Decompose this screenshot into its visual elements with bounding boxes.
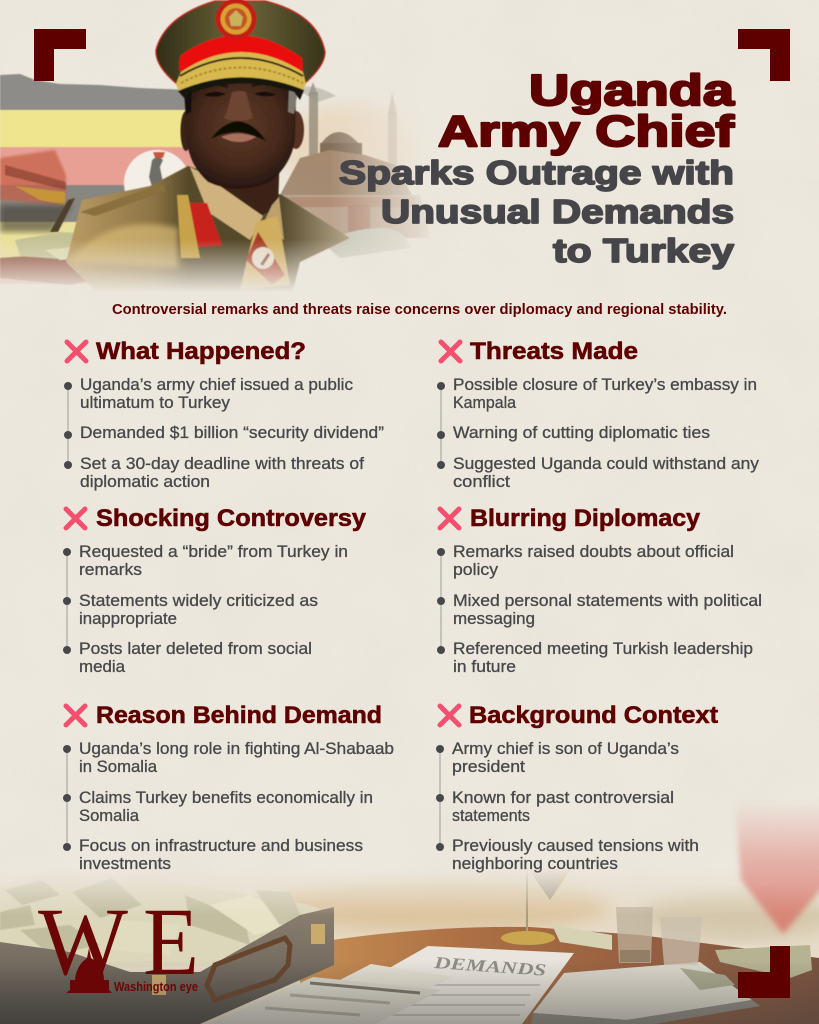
neck	[222, 172, 280, 215]
bullet text: Set a 30-day deadline with threats of	[80, 455, 364, 473]
logo: Washington Eye: E	[143, 888, 199, 995]
bullet text	[453, 376, 760, 491]
red band	[179, 35, 303, 74]
icon: x mark	[67, 342, 86, 361]
timeline	[63, 548, 71, 654]
collar	[190, 167, 263, 240]
heading: Threats Made	[470, 338, 638, 365]
bullet text: president	[452, 758, 525, 776]
bullet text: Army chief is son of Uganda’s	[452, 740, 679, 758]
bottom shade	[118, 967, 819, 1024]
bullet text	[79, 543, 348, 676]
bullet text: statements	[452, 807, 530, 825]
money and case left	[0, 198, 85, 285]
timeline	[63, 745, 71, 851]
subtitle: Controversial remarks and threats raise concerns over diplomacy and regional stability.	[112, 302, 727, 318]
cap badge	[216, 0, 256, 40]
bullet text	[79, 740, 394, 873]
bullet text: investments	[79, 855, 171, 873]
bullet text: Remarks raised doubts about official	[453, 543, 734, 561]
bullet text: Focus on infrastructure and business	[79, 837, 363, 855]
bottom scene: briefcase, money, table, papers	[0, 860, 819, 1024]
bullet text: Referenced meeting Turkish leadership	[453, 640, 753, 658]
desk flag	[501, 872, 568, 945]
heading: What Happened?	[96, 338, 306, 365]
hero illustration: flag, city, officer	[0, 0, 430, 295]
demands newspaper	[376, 946, 574, 1024]
money stacks	[0, 879, 322, 967]
tie	[240, 216, 290, 290]
Istanbul skyline	[278, 82, 430, 258]
bullet text	[452, 740, 699, 873]
title: Army Chief	[438, 107, 734, 156]
nose	[224, 91, 253, 121]
mustache	[211, 121, 266, 141]
bullet text: Previously caused tensions with	[452, 837, 699, 855]
bullet text: ultimatum to Turkey	[80, 394, 231, 412]
bullet text: in Somalia	[79, 758, 158, 776]
officer	[66, 0, 350, 295]
bullet text: Posts later deleted from social	[79, 640, 312, 658]
icon: x mark	[66, 706, 85, 725]
bullet text: Uganda’s army chief issued a public	[80, 376, 353, 394]
timeline	[64, 382, 72, 469]
head	[184, 81, 296, 189]
bullet text: policy	[453, 561, 499, 579]
timeline	[436, 745, 444, 851]
bullet text: diplomatic action	[80, 473, 210, 491]
bullet text: media	[79, 658, 126, 676]
title: Sparks Outrage with	[339, 154, 734, 191]
title: to Turkey	[553, 232, 735, 269]
bullet text: Suggested Uganda could withstand any	[453, 455, 760, 473]
cash on desk	[552, 925, 612, 950]
gold braid	[176, 52, 306, 92]
corner bracket bottom right	[738, 946, 790, 998]
bullet text: Uganda’s long role in fighting Al-Shabaab	[79, 740, 394, 758]
timeline	[437, 382, 445, 469]
bullet text: Requested a “bride” from Turkey in	[79, 543, 348, 561]
logo: Washington Eye	[38, 888, 199, 995]
heading: Blurring Diplomacy	[470, 505, 701, 532]
title: Uganda	[529, 66, 735, 115]
cap crown	[156, 1, 325, 84]
logo: Washington Eye: Washington eye	[114, 980, 198, 994]
bullet text: in future	[453, 658, 516, 676]
bullet text: remarks	[79, 561, 142, 579]
ears	[180, 110, 189, 152]
corner bracket top right	[738, 29, 790, 81]
red gorget patch and aiguillette	[189, 203, 222, 247]
panel: threats made	[437, 338, 760, 491]
bullet text	[80, 376, 384, 491]
icon: x mark	[440, 706, 459, 725]
glasses	[616, 907, 702, 965]
corner bracket top left	[34, 29, 86, 81]
panel: shocking controversy	[63, 505, 367, 676]
bullet text: Claims Turkey benefits economically in	[79, 789, 373, 807]
bullet text: Demanded $1 billion “security dividend”	[80, 424, 384, 442]
bullet text	[453, 543, 762, 676]
panel: blurring diplomacy	[437, 505, 762, 676]
table	[300, 927, 819, 1024]
demands newspaper: DEMANDS	[432, 953, 547, 980]
foreground newspaper	[262, 977, 440, 1024]
title: Unusual Demands	[381, 193, 734, 230]
paper pile	[530, 962, 760, 1024]
icon: x mark	[440, 509, 459, 528]
icon: x mark	[66, 509, 85, 528]
heading: Reason Behind Demand	[96, 702, 382, 729]
bullet text: Possible closure of Turkey’s embassy in	[453, 376, 757, 394]
logo: Washington Eye: W	[38, 888, 128, 995]
briefcase	[0, 907, 334, 1024]
panel: what happened	[64, 338, 384, 491]
bullet text: Warning of cutting diplomatic ties	[453, 424, 710, 442]
title	[339, 66, 735, 269]
panel: background context	[436, 702, 718, 873]
timeline	[437, 548, 445, 654]
icon: capitol dome	[66, 948, 112, 993]
eyes	[204, 92, 226, 97]
panel: reason behind demand	[63, 702, 394, 873]
desk flag right	[735, 800, 819, 934]
bullet text: messaging	[453, 610, 535, 628]
bullet text: Somalia	[79, 807, 140, 825]
bullet text: Kampala	[453, 394, 517, 412]
background sheet	[340, 964, 453, 986]
bullet text: conflict	[453, 473, 510, 491]
icon: x mark	[441, 342, 460, 361]
bullet text: inappropriate	[79, 610, 177, 628]
bullet text: Mixed personal statements with political	[453, 592, 762, 610]
bullet text: neighboring countries	[452, 855, 618, 873]
bullet text: Statements widely criticized as	[79, 592, 318, 610]
heading: Background Context	[469, 702, 718, 729]
uniform	[66, 166, 350, 295]
bullet text: Known for past controversial	[452, 789, 674, 807]
Uganda flag stripes	[0, 74, 195, 284]
heading: Shocking Controversy	[96, 505, 367, 532]
